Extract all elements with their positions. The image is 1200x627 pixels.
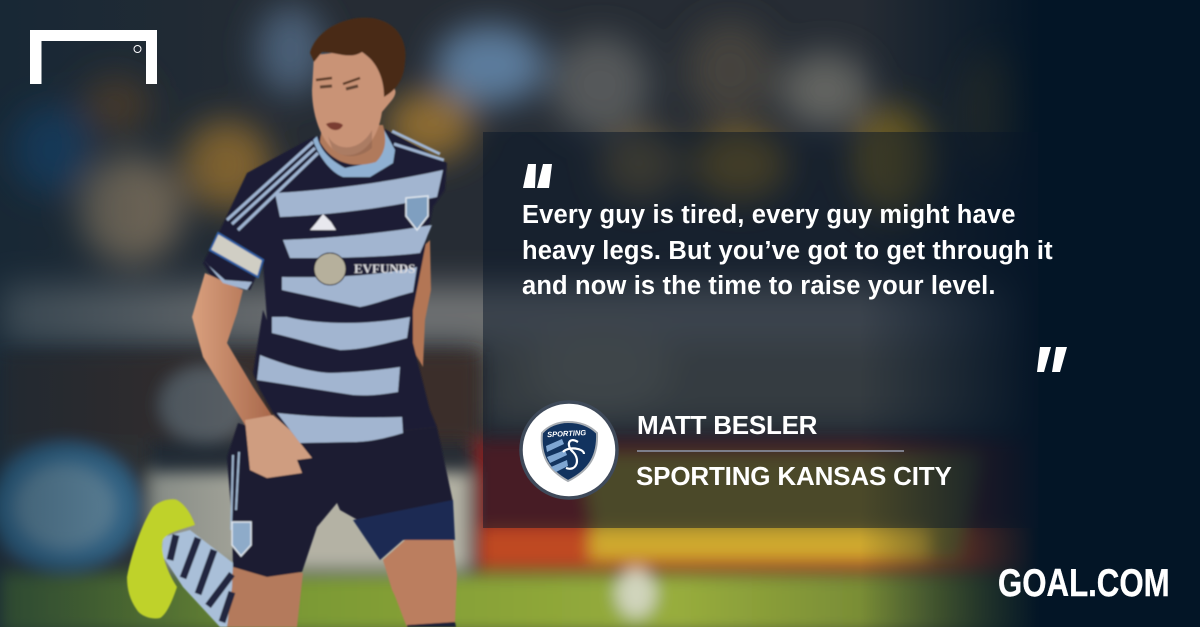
quote text: Every guy is tired, every guy might have xyxy=(522,201,1016,229)
shirt badges and sponsor xyxy=(232,196,428,556)
hair xyxy=(310,18,406,97)
logo: GOAL.COM wordmark: GOAL.COM xyxy=(998,562,1170,605)
player name: MATT BESLER xyxy=(637,410,817,440)
head xyxy=(312,50,395,156)
player legs xyxy=(227,533,457,627)
armband xyxy=(204,233,263,290)
shirt stripes xyxy=(257,170,443,443)
icon: closing quote mark xyxy=(1037,347,1067,372)
sock xyxy=(162,530,233,627)
quote text: heavy legs. But you’ve got to get through it xyxy=(522,236,1053,264)
sleeve stripes xyxy=(227,131,444,230)
shirt badges and sponsor: EVFUNDS xyxy=(354,261,415,276)
player far arm xyxy=(412,240,431,367)
near arm and hand xyxy=(192,273,312,478)
shorts xyxy=(227,423,453,577)
club badge: Sporting Kansas City xyxy=(519,400,619,500)
club badge: Sporting Kansas City: SPORTING xyxy=(547,428,586,439)
quote text xyxy=(522,201,1053,300)
icon: opening quote mark xyxy=(523,164,552,188)
collar xyxy=(313,128,395,177)
club name: SPORTING KANSAS CITY xyxy=(636,461,952,491)
divider xyxy=(637,450,904,452)
neck xyxy=(320,125,385,165)
undershorts xyxy=(353,500,455,560)
quote text: and now is the time to raise your level. xyxy=(522,272,996,300)
boot xyxy=(127,499,195,618)
logo: Goal bracket xyxy=(30,30,157,84)
shirt xyxy=(203,128,447,442)
panel: quote backdrop xyxy=(483,132,1038,528)
